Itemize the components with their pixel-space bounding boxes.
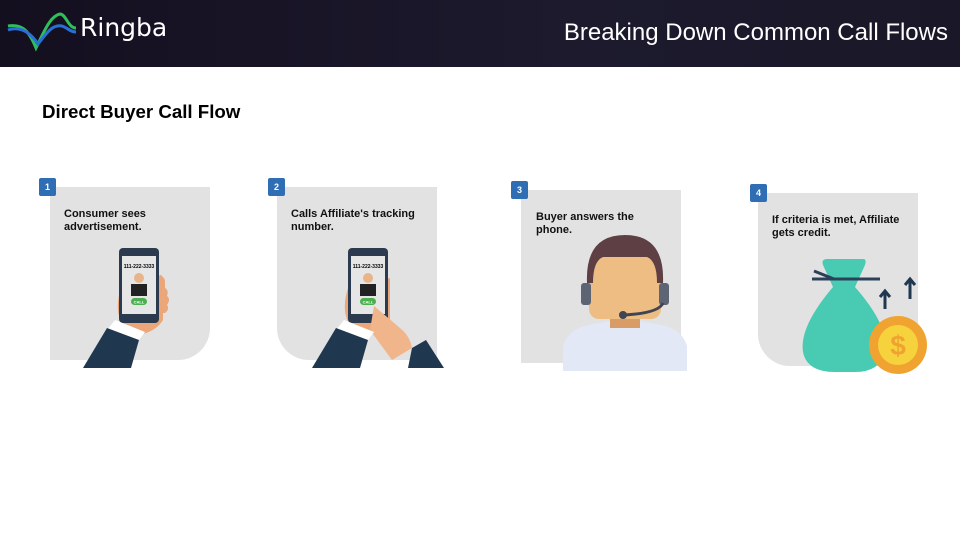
text 3	[536, 211, 634, 236]
text 4: gets credit.	[772, 227, 831, 239]
badge 1	[39, 178, 56, 196]
icon: money bag with coin	[802, 259, 927, 374]
text 1: advertisement.	[64, 221, 142, 233]
text 2: Calls Affiliate's tracking	[291, 208, 415, 220]
header bar	[0, 0, 960, 67]
text 2	[291, 208, 415, 233]
panel: step 1	[39, 178, 210, 368]
icon: phone being tapped	[312, 248, 444, 368]
icon: phone being tapped: CALL	[363, 300, 374, 304]
panel: step 4	[750, 184, 927, 374]
text 3: phone.	[536, 224, 572, 236]
text 1	[64, 208, 146, 233]
icon: call center agent	[563, 235, 687, 371]
panel: step 3	[511, 181, 687, 371]
icon: money bag with coin: $	[890, 330, 906, 361]
badge 4: 4	[756, 188, 761, 198]
text 1: Consumer sees	[64, 208, 146, 220]
text 4	[772, 214, 899, 239]
badge 1: 1	[45, 182, 50, 192]
title: Breaking Down Common Call Flows	[564, 19, 948, 46]
text 2: number.	[291, 221, 334, 233]
icon: phone in hand	[83, 248, 169, 368]
badge 4	[750, 184, 767, 202]
badge 3	[511, 181, 528, 199]
text 3: Buyer answers the	[536, 211, 634, 223]
icon: phone in hand: 111-222-3333	[124, 264, 155, 270]
panel: step 2	[268, 178, 444, 368]
badge 2: 2	[274, 182, 279, 192]
text 4: If criteria is met, Affiliate	[772, 214, 899, 226]
badge 3: 3	[517, 185, 522, 195]
icon: phone in hand: CALL	[134, 300, 145, 304]
section heading: Direct Buyer Call Flow	[42, 101, 240, 122]
logo: Ringba	[80, 13, 167, 42]
logo	[8, 12, 167, 52]
badge 2	[268, 178, 285, 196]
icon: phone being tapped: 111-222-3333	[353, 264, 384, 270]
